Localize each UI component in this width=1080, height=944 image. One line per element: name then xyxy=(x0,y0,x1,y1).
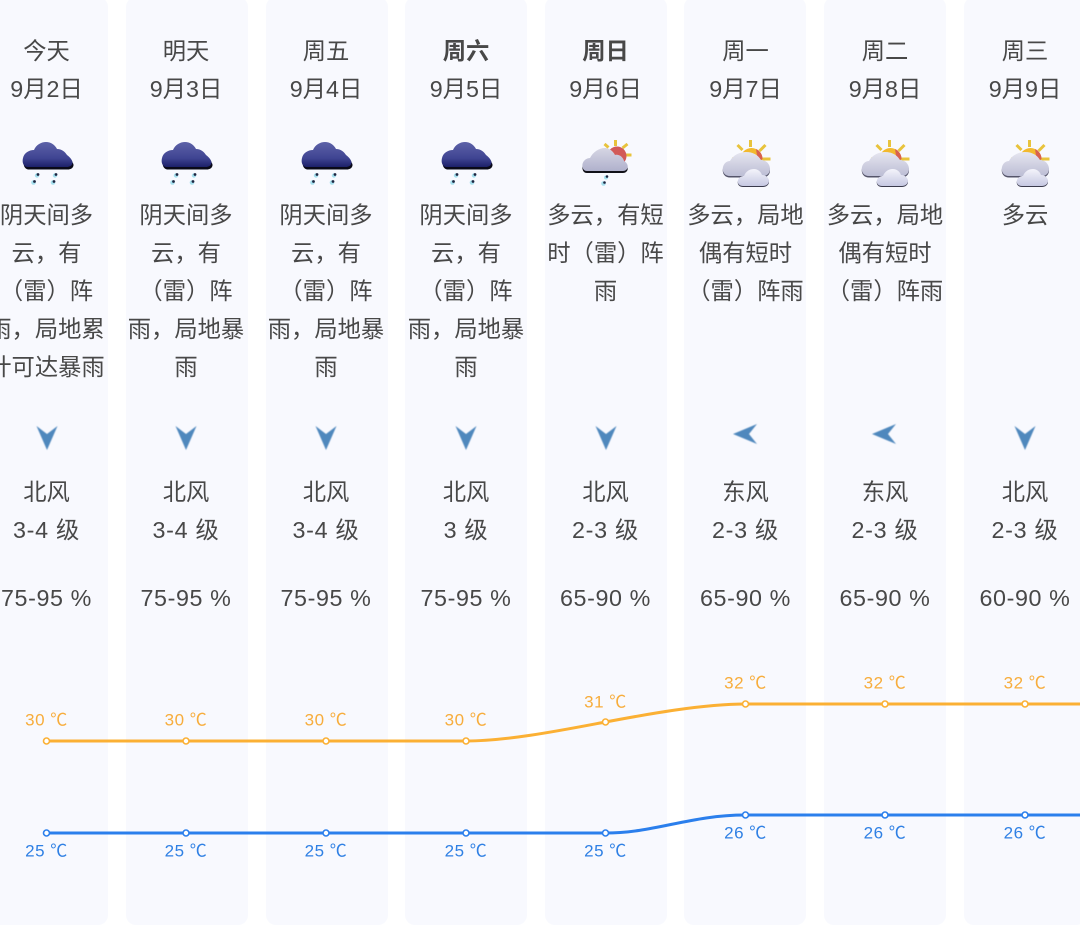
weather description: 云，有 xyxy=(291,240,361,266)
date heading: 周日 xyxy=(582,38,629,64)
low temperature series: 25 ℃ xyxy=(305,842,347,860)
panel: day 3 background xyxy=(266,0,388,925)
weather description: （雷）阵雨 xyxy=(687,278,804,304)
weather description: （雷）阵 xyxy=(419,278,513,304)
date heading: 9月8日 xyxy=(849,76,921,102)
icon: rain cloud xyxy=(162,142,212,185)
icon: north wind arrow xyxy=(455,426,477,450)
weather description: 云，有 xyxy=(12,240,81,266)
wind text: 3-4 级 xyxy=(293,517,359,543)
icon: north wind arrow xyxy=(36,426,58,450)
column: 周一 9月7日 xyxy=(687,38,804,611)
low temperature series xyxy=(25,812,1080,860)
weather description: 多云，有短 xyxy=(547,202,664,228)
date heading xyxy=(150,38,222,102)
weather description: 云，有 xyxy=(151,240,221,266)
weather description: （雷）阵 xyxy=(0,278,93,304)
weather description: （雷）阵 xyxy=(139,278,233,304)
date heading: 周五 xyxy=(303,38,349,64)
low temperature series: 25 ℃ xyxy=(165,842,207,860)
low temperature series: 26 ℃ xyxy=(724,824,767,842)
high temperature series: 32 ℃ xyxy=(724,674,767,692)
wind text: 北风 xyxy=(582,479,629,505)
high temperature series: 32 ℃ xyxy=(1004,674,1046,692)
weather description: 阴天间多 xyxy=(139,202,233,228)
wind text: 北风 xyxy=(443,479,489,505)
panel: day 8 background xyxy=(964,0,1080,925)
date heading: 今天 xyxy=(23,38,70,64)
humidity: 75-95 % xyxy=(280,585,371,611)
high temperature series: 30 ℃ xyxy=(305,710,347,730)
weather description: 阴天间多 xyxy=(0,202,93,228)
high temperature series: 30 ℃ xyxy=(165,710,207,730)
wind text: 3 级 xyxy=(444,517,488,543)
wind text: 2-3 级 xyxy=(852,517,918,543)
panel: day 2 background xyxy=(126,0,248,925)
icon: rain cloud xyxy=(302,142,352,185)
weather description: 时（雷）阵 xyxy=(547,240,664,266)
wind text xyxy=(293,479,359,543)
date heading: 周一 xyxy=(722,38,769,64)
wind text: 北风 xyxy=(303,479,349,505)
date heading xyxy=(430,38,502,102)
wind text: 东风 xyxy=(862,479,908,505)
weather description xyxy=(408,202,524,380)
panel: day 7 background xyxy=(824,0,946,925)
weather description: 阴天间多 xyxy=(419,202,513,228)
weather description xyxy=(547,202,664,304)
date heading: 9月4日 xyxy=(290,76,362,102)
date heading: 9月7日 xyxy=(709,76,782,102)
low temperature series: 26 ℃ xyxy=(864,824,906,842)
column: 周日 9月6日 xyxy=(547,38,664,611)
weather description: 阴天间多 xyxy=(279,202,373,228)
weather description: 云，有 xyxy=(431,240,501,266)
date heading: 周六 xyxy=(443,38,489,64)
wind text xyxy=(153,479,219,543)
weather description: 多云，局地 xyxy=(827,202,943,228)
panel: day 6 background xyxy=(684,0,806,925)
icon: east wind arrow xyxy=(865,420,905,456)
icon: north wind arrow xyxy=(1005,420,1045,456)
date heading xyxy=(709,38,782,102)
weather description: 多云 xyxy=(1002,202,1048,228)
humidity: 60-90 % xyxy=(980,585,1070,611)
date heading: 周二 xyxy=(862,38,908,64)
weather description xyxy=(0,202,105,380)
wind text: 2-3 级 xyxy=(572,517,639,543)
wind text xyxy=(443,479,489,543)
weather description: 多云，局地 xyxy=(687,202,804,228)
icon: north wind arrow xyxy=(175,426,197,450)
panel: day 5 background xyxy=(544,0,666,925)
weather description: 雨 xyxy=(174,354,198,380)
weather description: 偶有短时 xyxy=(838,240,932,266)
weather description: 雨，局地暴 xyxy=(408,316,524,342)
humidity: 65-90 % xyxy=(700,585,791,611)
weather description: （雷）阵雨 xyxy=(827,278,943,304)
wind text: 3-4 级 xyxy=(153,517,219,543)
weather description xyxy=(128,202,244,380)
humidity: 75-95 % xyxy=(140,585,231,611)
weather description: 雨 xyxy=(454,354,478,380)
weather description: 偶有短时 xyxy=(699,240,792,266)
weather description: 雨，局地暴 xyxy=(128,316,244,342)
column: 周三 9月9日 xyxy=(945,0,1080,620)
date heading xyxy=(945,32,1080,108)
date heading xyxy=(569,38,642,102)
icon: rain cloud xyxy=(442,142,492,185)
wind text: 北风 xyxy=(1002,479,1048,505)
weather description: 雨 xyxy=(594,278,617,304)
column: 周五 9月4日 xyxy=(268,38,384,611)
high temperature series xyxy=(25,674,1080,744)
low temperature series: 25 ℃ xyxy=(445,842,487,860)
wind text xyxy=(13,479,80,543)
date heading: 周三 xyxy=(1002,38,1048,64)
weather description: 雨，局地暴 xyxy=(268,316,384,342)
date heading: 9月2日 xyxy=(10,76,83,102)
high temperature series: 31 ℃ xyxy=(584,692,627,712)
icon: rain cloud xyxy=(22,142,74,185)
weather description: 雨 xyxy=(314,354,338,380)
wind text xyxy=(805,473,965,549)
panel: day 4 background xyxy=(405,0,527,925)
panel: day 1 background xyxy=(0,0,108,925)
column: 周六 9月5日 xyxy=(408,38,524,611)
icon: north wind arrow xyxy=(595,426,617,450)
icon: sun behind clouds xyxy=(862,140,910,187)
wind text: 3-4 级 xyxy=(13,517,80,543)
column: 今天 9月2日 xyxy=(0,38,105,611)
column: 明天 9月3日 xyxy=(128,38,244,611)
column: 周二 9月8日 xyxy=(827,38,943,611)
low temperature series: 25 ℃ xyxy=(584,842,627,860)
date heading: 9月5日 xyxy=(430,76,502,102)
humidity: 65-90 % xyxy=(560,585,651,611)
humidity: 75-95 % xyxy=(1,585,92,611)
date heading: 9月6日 xyxy=(569,76,642,102)
humidity: 65-90 % xyxy=(840,585,930,611)
weather description xyxy=(687,202,804,304)
icon: east wind arrow xyxy=(732,424,758,444)
wind text xyxy=(945,473,1080,549)
wind text: 北风 xyxy=(23,479,70,505)
weather description: （雷）阵 xyxy=(279,278,373,304)
weather description xyxy=(827,202,943,304)
high temperature series: 30 ℃ xyxy=(25,710,68,730)
low temperature series: 26 ℃ xyxy=(1004,824,1046,842)
high temperature series: 32 ℃ xyxy=(864,674,906,692)
icon: sun behind clouds xyxy=(995,140,1055,190)
wind text xyxy=(712,479,779,543)
humidity: 75-95 % xyxy=(420,585,511,611)
wind text: 2-3 级 xyxy=(992,517,1058,543)
date heading: 9月9日 xyxy=(989,76,1061,102)
date heading xyxy=(849,38,921,102)
wind text: 东风 xyxy=(722,479,769,505)
weather description xyxy=(268,202,384,380)
low temperature series: 25 ℃ xyxy=(25,842,68,860)
high temperature series: 30 ℃ xyxy=(445,710,487,730)
icon: sun behind clouds xyxy=(722,140,770,187)
date heading: 9月3日 xyxy=(150,76,222,102)
wind text xyxy=(572,479,639,543)
icon: sun, cloud and rain xyxy=(582,140,632,186)
date heading xyxy=(10,38,83,102)
date heading xyxy=(290,38,362,102)
date heading: 明天 xyxy=(163,38,209,64)
icon: north wind arrow xyxy=(315,426,337,450)
wind text: 北风 xyxy=(163,479,209,505)
wind text: 2-3 级 xyxy=(712,517,779,543)
